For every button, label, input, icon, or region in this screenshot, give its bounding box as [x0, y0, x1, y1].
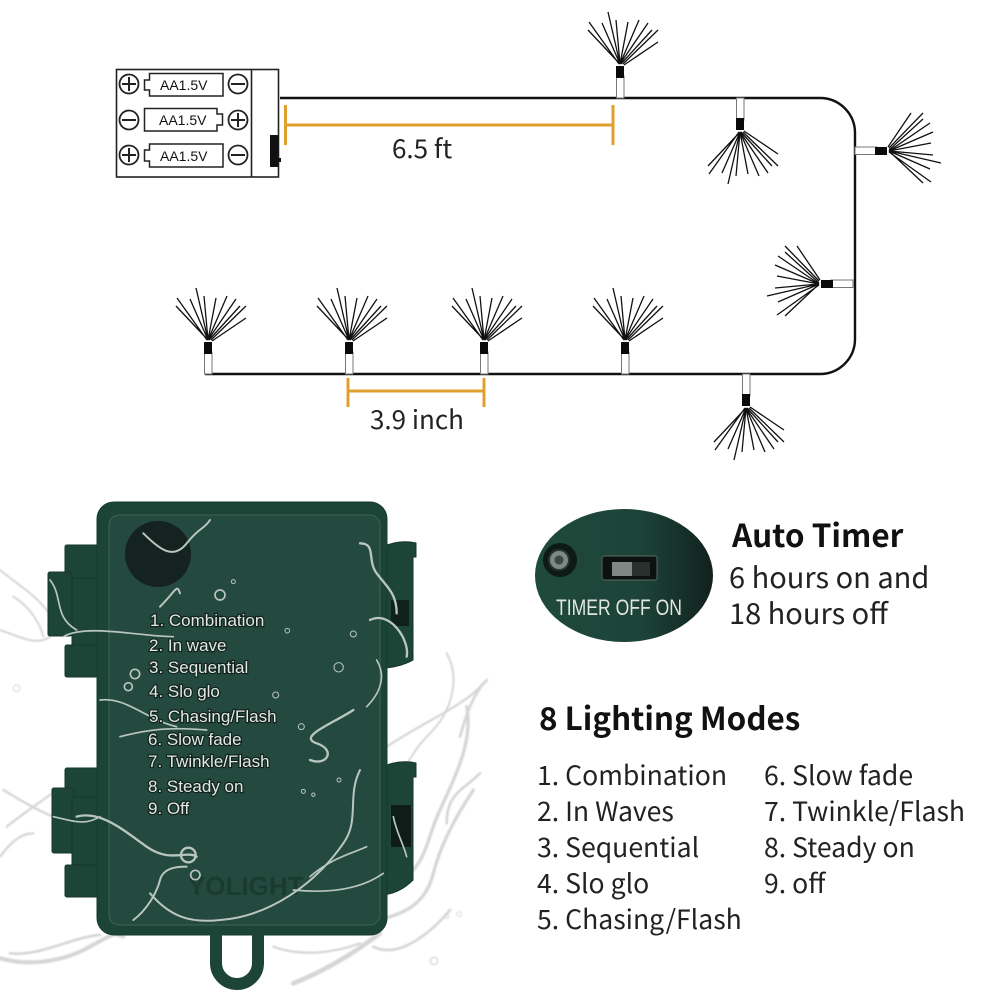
dimension: 3.9 inch: 3.9 inch [370, 400, 464, 437]
round seal [125, 521, 191, 587]
enclosure body [97, 502, 387, 935]
lighting modes: column one: 3. Sequential [537, 826, 699, 865]
mode list on enclosure: 2. In wave [149, 636, 226, 655]
embossed brand: YOLIGHT [188, 871, 304, 901]
auto timer text: 6 hours on and [729, 555, 929, 597]
heading: lighting modes: 8 Lighting Modes [539, 695, 800, 740]
mode list on enclosure: 6. Slow fade [148, 730, 242, 749]
dimension: 6.5 ft: 6.5 ft [392, 129, 452, 166]
mode list on enclosure: 5. Chasing/Flash [149, 707, 277, 726]
dimension: 6.5 ft [285, 105, 613, 166]
auto timer text: 18 hours off [729, 591, 889, 633]
slide switch [602, 556, 657, 580]
lighting modes: column two: 8. Steady on [764, 826, 915, 865]
mode list on enclosure: 8. Steady on [148, 777, 243, 796]
mode list on enclosure [148, 611, 277, 818]
battery box: AA1.5V [160, 148, 208, 164]
lighting modes: column two [764, 754, 965, 901]
mode list on enclosure: 9. Off [148, 799, 190, 818]
hanging loop [216, 934, 258, 984]
battery box [116, 69, 281, 177]
enclosure hinges and clips [48, 542, 416, 897]
light string wire [205, 98, 855, 374]
lighting modes: column one [537, 754, 742, 937]
dimension: 3.9 inch [348, 378, 484, 437]
mode list on enclosure: 3. Sequential [149, 658, 248, 677]
light sprays on the string [176, 12, 941, 460]
water splash behind enclosure [0, 570, 487, 983]
lighting modes: column two: 7. Twinkle/Flash [764, 790, 965, 829]
water on enclosure [50, 520, 407, 921]
switch label: TIMER OFF ON [556, 595, 682, 620]
auto timer text [729, 555, 929, 633]
waterproof controller enclosure [48, 502, 416, 984]
battery box: AA1.5V [160, 77, 208, 93]
heading: auto timer: Auto Timer [731, 511, 904, 557]
timer switch photo [535, 509, 713, 642]
lighting modes: column two: 9. off [764, 862, 826, 901]
lighting modes: column one: 4. Slo glo [537, 862, 649, 901]
mode list on enclosure: 7. Twinkle/Flash [148, 752, 270, 771]
lighting modes: column two: 6. Slow fade [764, 754, 913, 793]
lighting modes: column one: 1. Combination [537, 754, 727, 793]
mode list on enclosure: 4. Slo glo [149, 682, 220, 701]
battery box: AA1.5V [159, 112, 207, 128]
mode list on enclosure: 1. Combination [150, 611, 264, 630]
screw [543, 543, 577, 577]
clip slots [391, 600, 409, 626]
lighting modes: column one: 2. In Waves [537, 790, 674, 829]
lighting modes: column one: 5. Chasing/Flash [537, 898, 742, 937]
